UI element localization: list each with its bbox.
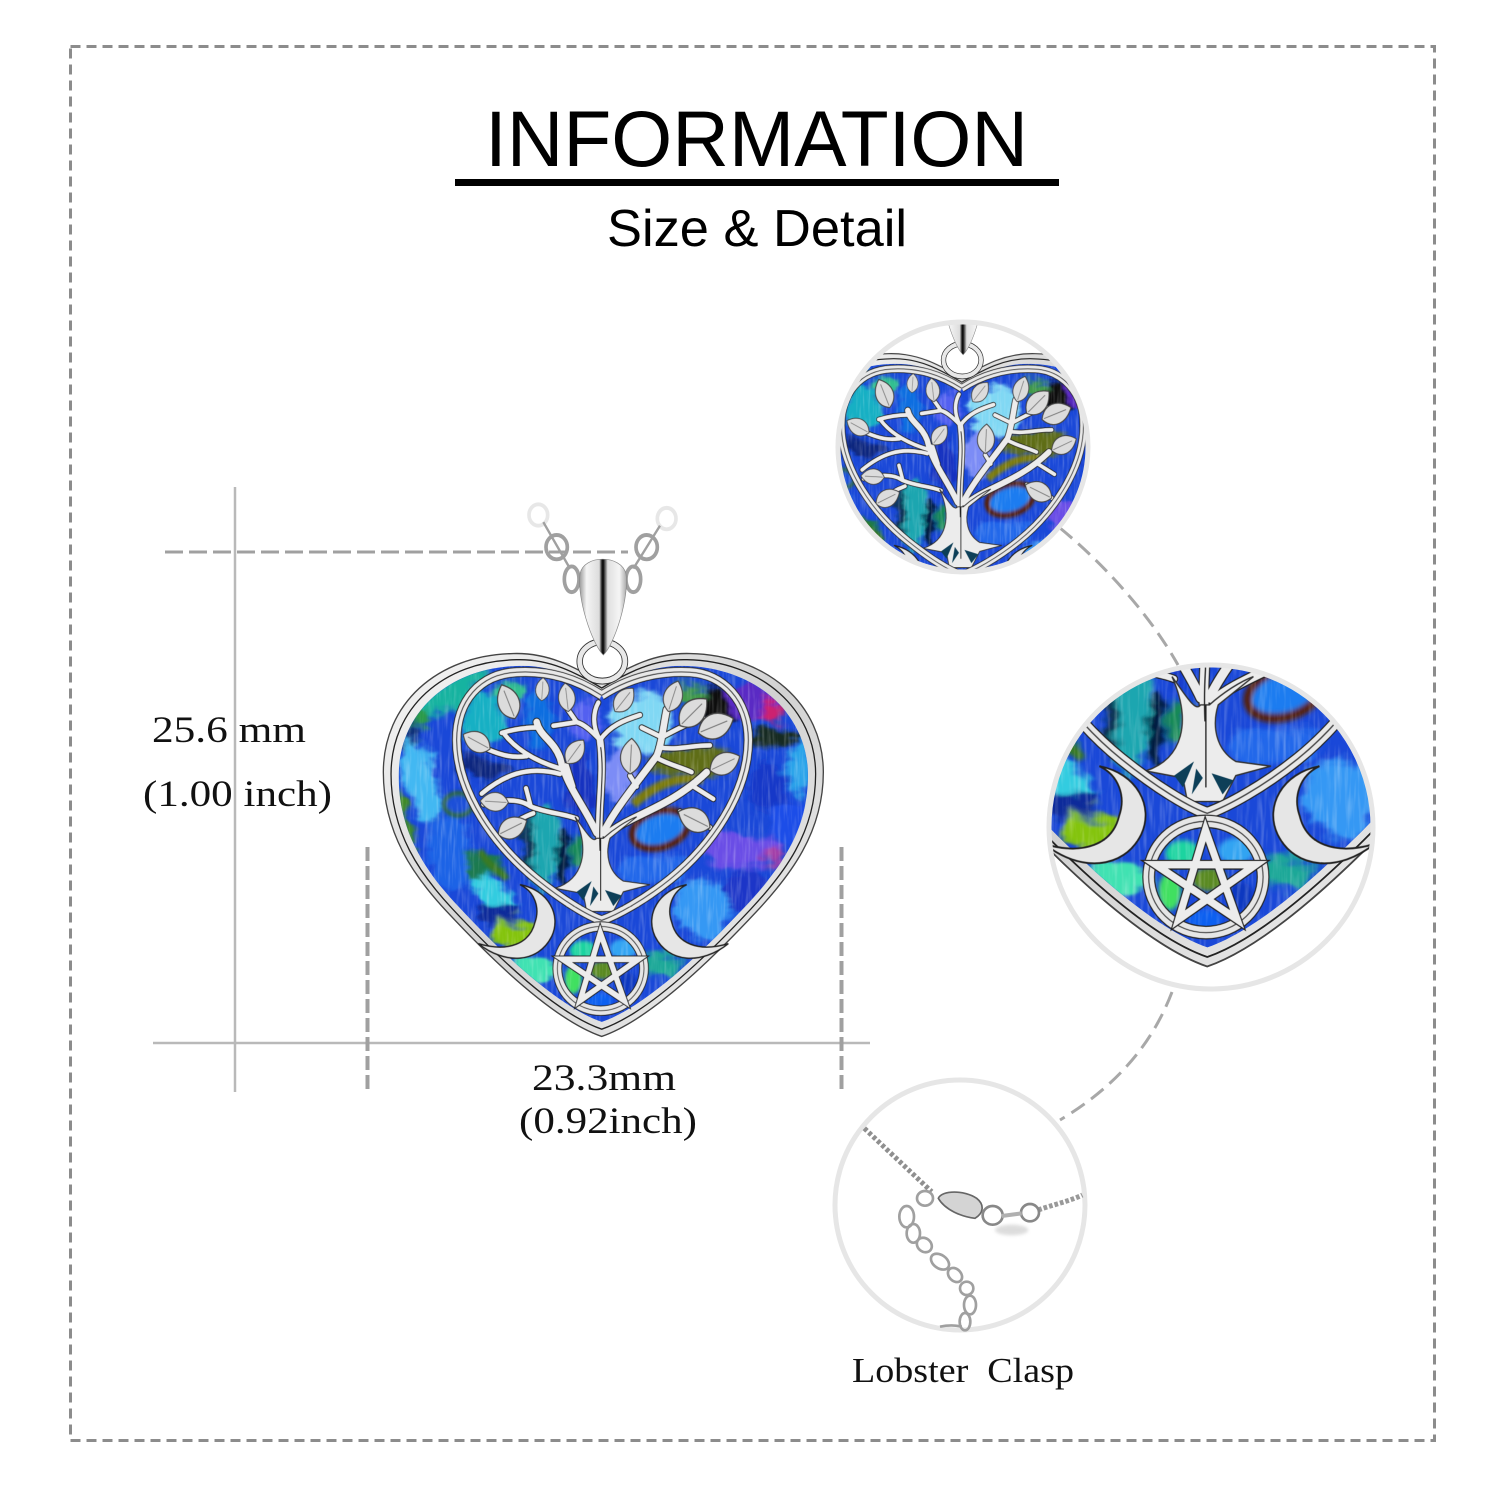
lower connector dashed curve bbox=[1060, 992, 1172, 1120]
width label bbox=[519, 1058, 697, 1142]
detail circle: tree of life bbox=[836, 320, 1090, 574]
title: INFORMATION bbox=[485, 94, 1028, 183]
main pendant bbox=[382, 504, 827, 1040]
extender chain bbox=[899, 1191, 976, 1330]
clasp rings bbox=[983, 1204, 1039, 1225]
height label bbox=[143, 710, 332, 815]
height label: (1.00 inch) bbox=[143, 774, 332, 815]
width label: (0.92inch) bbox=[519, 1101, 697, 1142]
upper chain bbox=[864, 1128, 932, 1192]
upper connector dashed curve bbox=[1060, 528, 1178, 665]
lobster clasp label: Lobster Clasp bbox=[852, 1351, 1074, 1390]
right chain bbox=[1038, 1195, 1082, 1210]
height dimension vertical line bbox=[234, 487, 236, 1092]
detail circle: pentagram and moons bbox=[938, 662, 1376, 1298]
clasp bbox=[938, 1192, 982, 1218]
detail circle: lobster clasp bbox=[835, 1080, 1085, 1330]
bottom measure line bbox=[153, 1042, 870, 1044]
top dashed measure line bbox=[165, 550, 628, 554]
right dashed width marker bbox=[840, 847, 844, 1092]
subtitle: Size & Detail bbox=[607, 200, 907, 258]
title underline bbox=[455, 179, 1059, 186]
clasp shadow bbox=[995, 1225, 1028, 1235]
width label: 23.3mm bbox=[532, 1058, 676, 1099]
left dashed width marker bbox=[366, 847, 370, 1092]
height label: 25.6 mm bbox=[152, 710, 306, 751]
